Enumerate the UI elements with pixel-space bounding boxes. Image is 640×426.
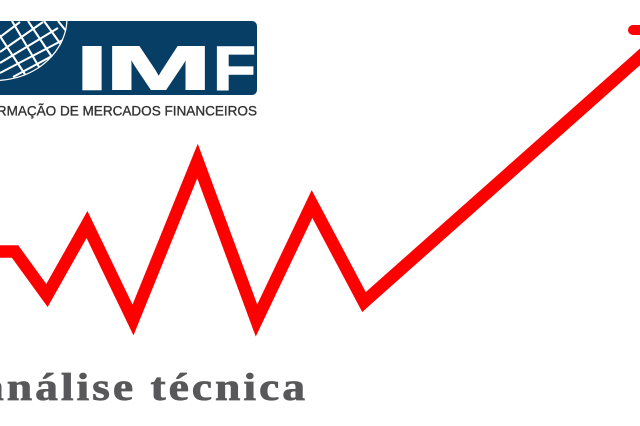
logo background panel	[0, 21, 257, 95]
line chart: red price trend	[0, 48, 640, 320]
icon: globe	[0, 21, 68, 82]
logo letters IMF	[76, 34, 256, 103]
logo letters IMF: M	[105, 34, 212, 103]
logo: IMF	[0, 21, 257, 118]
short red dash at top right	[633, 25, 640, 35]
logo letters IMF: I	[76, 34, 108, 103]
logo letters IMF: F	[213, 34, 256, 103]
